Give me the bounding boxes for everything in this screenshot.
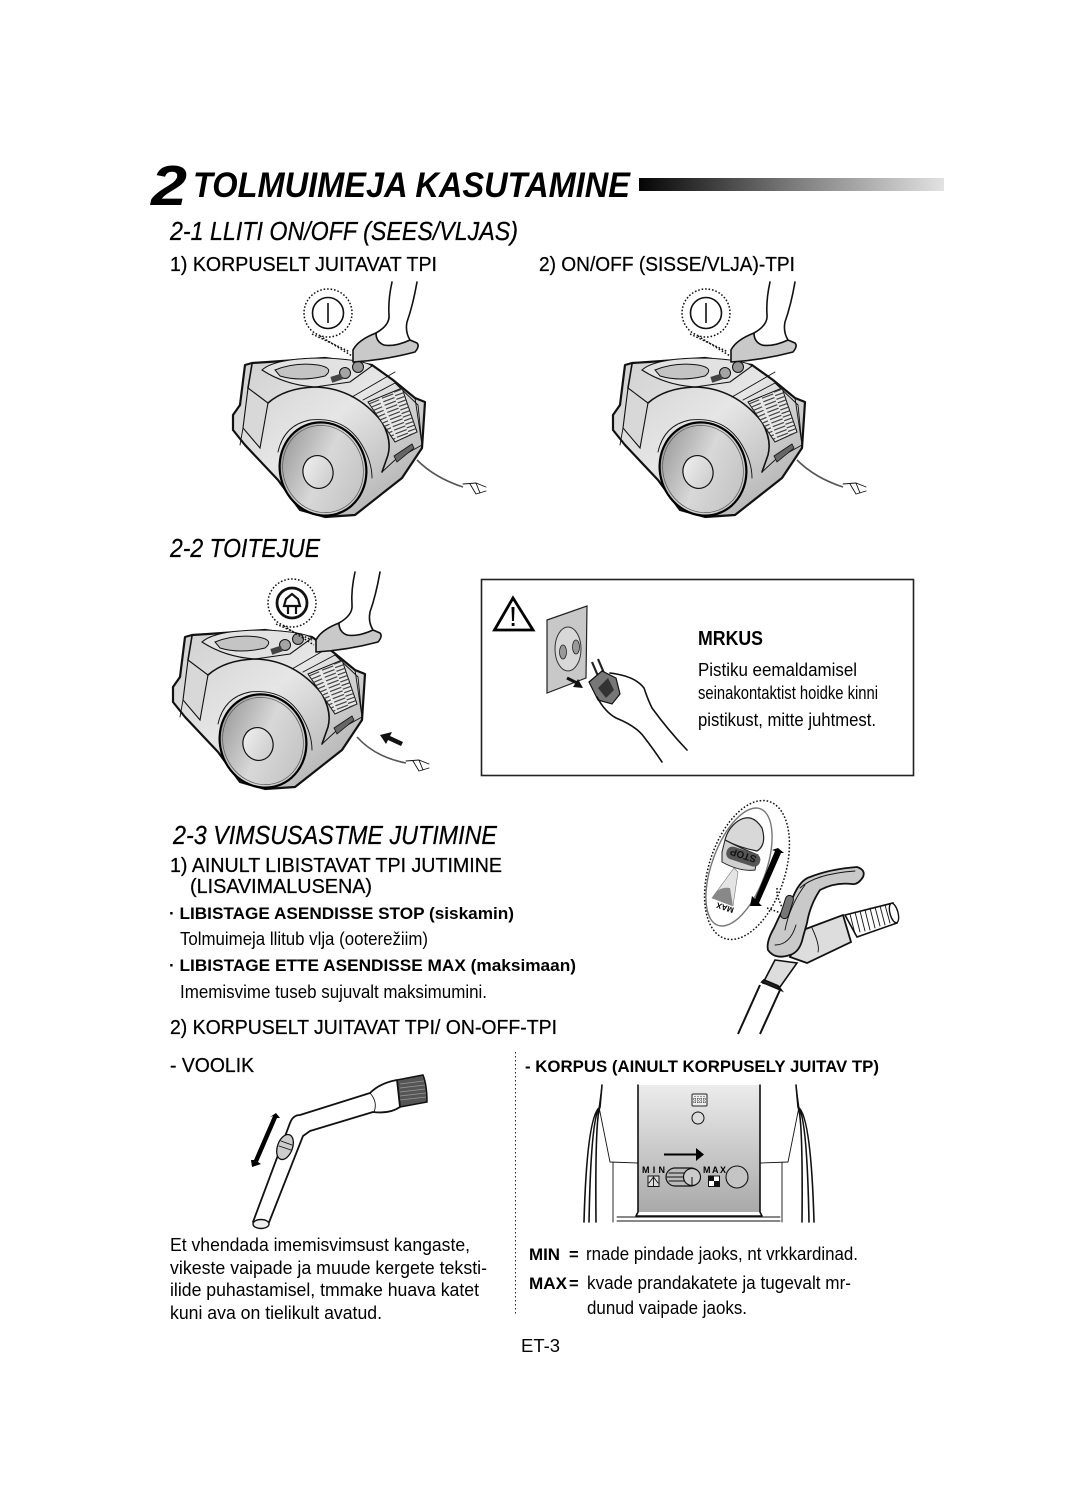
illustration: wall socket and hand [547, 606, 687, 762]
instruction: max position: Imemisvime tuseb sujuvalt maksimumini. [180, 982, 487, 1002]
illustration: vacuum with cord rewind [173, 572, 429, 799]
arrow: min to max [664, 1148, 704, 1161]
instruction: stop position [169, 905, 514, 949]
callout: slider detail [689, 790, 805, 950]
illustration: vacuum with foot on body switch [233, 282, 486, 527]
icon: warning triangle [494, 598, 533, 630]
subheading: sliding switch [170, 854, 502, 898]
control: suction slider [666, 1168, 700, 1186]
text: hose instructions [170, 1235, 487, 1323]
heading 2-2: 2-2 TOITEJUE [169, 535, 321, 563]
text: MAX setting: MAX [529, 1275, 567, 1293]
icon: floor min [648, 1176, 659, 1186]
heading 2-1: 2-1 LLITI ON/OFF (SEES/VLJAS) [169, 218, 518, 246]
subheading: body switch: 1) KORPUSELT JUITAVAT TPI [170, 253, 437, 276]
icon: on symbol [682, 289, 730, 356]
icon: indicator lamp [692, 1112, 704, 1124]
illustration: hose handle with slider [689, 790, 900, 1034]
note text: Pistiku eemaldamisel [698, 660, 857, 680]
text: hose instructions: kuni ava on tielikult avatud. [170, 1303, 382, 1323]
text: MIN setting: = [569, 1246, 579, 1264]
note text: seinakontaktist hoidke kinni [698, 683, 878, 703]
text: hose instructions: ilide puhastamisel, tmmake huava katet [170, 1280, 479, 1300]
section number: 2 [150, 154, 187, 218]
subheading: sliding switch: 1) AINULT LIBISTAVAT TPI JUTIMINE [170, 854, 502, 877]
subheading: on/off pedal: 2) ON/OFF (SISSE/VLJA)-TPI [539, 253, 795, 276]
callout: slider detail: STOP [729, 845, 758, 864]
instruction: max position: · LIBISTAGE ETTE ASENDISSE MAX (maksimaan) [169, 957, 576, 975]
icon: filter indicator [692, 1094, 707, 1106]
text: MIN setting: rnade pindade jaoks, nt vrkkardinad. [586, 1244, 858, 1264]
note text: pistikust, mitte juhtmest. [698, 710, 876, 730]
subheading: body and on/off switch: 2) KORPUSELT JUITAVAT TPI/ ON-OFF-TPI [170, 1016, 557, 1039]
illustration: hose handle from below [251, 1075, 427, 1228]
instruction: stop position: · LIBISTAGE ASENDISSE STOP (siskamin) [169, 905, 514, 923]
text: MAX setting: dunud vaipade jaoks. [587, 1298, 747, 1318]
text: MAX setting: kvade prandakatete ja tugevalt mr- [587, 1273, 851, 1293]
divider [514, 1052, 516, 1315]
panel: note [482, 580, 914, 776]
title: TOLMUIMEJA KASUTAMINE [193, 166, 632, 205]
text: MAX setting: = [569, 1275, 579, 1293]
callout: slider detail: MAX [715, 900, 735, 915]
label: hose: - VOOLIK [170, 1054, 254, 1077]
icon: power button [726, 1166, 748, 1188]
illustration: body control panel [584, 1085, 814, 1222]
icon: floor max [708, 1176, 720, 1186]
label: body: - KORPUS (AINULT KORPUSELY JUITAV TP) [525, 1058, 879, 1076]
label: MAX: MAX [703, 1165, 726, 1175]
instruction: stop position: Tolmuimeja llitub vlja (ooterežiim) [180, 929, 428, 949]
instruction: max position [169, 957, 576, 1002]
page number: ET-3 [521, 1336, 560, 1356]
heading 2-3: 2-3 VIMSUSASTME JUTIMINE [172, 822, 498, 850]
illustration: vacuum with foot on on/off pedal [613, 282, 866, 527]
text: MIN setting: MIN [529, 1246, 560, 1264]
title gradient bar [639, 178, 944, 191]
arrow: slide direction [251, 1113, 280, 1167]
text: hose instructions: vikeste vaipade ja muude kergete teksti- [170, 1258, 487, 1278]
arrow: cord rewind [380, 732, 403, 746]
subheading: sliding switch: (LISAVIMALUSENA) [190, 875, 372, 898]
label: MIN: MIN [642, 1165, 665, 1175]
note text [698, 660, 878, 730]
text: hose instructions: Et vhendada imemisvimsust kangaste, [170, 1235, 470, 1255]
text: MAX setting [529, 1273, 851, 1318]
icon: on symbol [304, 289, 352, 356]
note heading: MRKUS [698, 628, 763, 650]
icon: plug symbol [268, 579, 316, 645]
arrow: slide direction [750, 848, 784, 906]
